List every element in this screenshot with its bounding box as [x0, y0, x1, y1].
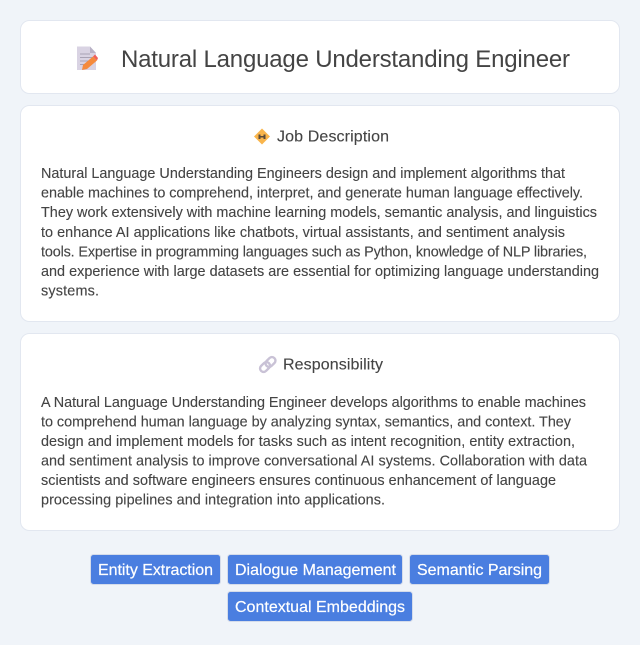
- text block: job description: tools. Expertise in programming languages such as Python, knowledge of NLP libraries,: [41, 244, 587, 260]
- tags: [90, 554, 550, 622]
- text block: responsibility: A Natural Language Understanding Engineer develops algorithms to enable machines: [41, 395, 586, 411]
- tag: entity extraction: Entity Extraction: [98, 562, 213, 579]
- panel: responsibility: [20, 334, 620, 530]
- text block: job description: systems.: [41, 284, 99, 300]
- text block: responsibility: design and implement models for tasks such as intent recognition, entity extraction,: [41, 434, 575, 450]
- icon: orange diamond: [254, 128, 270, 144]
- panel: job description: [20, 106, 620, 322]
- tag: semantic parsing: [410, 554, 550, 584]
- text block: responsibility: scientists and software engineers ensures continuous enhancement of language: [41, 473, 556, 489]
- tag: contextual embeddings: Contextual Embeddings: [235, 599, 405, 616]
- tag: semantic parsing: Semantic Parsing: [417, 562, 542, 579]
- heading: responsibility: Responsibility: [283, 356, 383, 374]
- text block: responsibility: [41, 395, 587, 508]
- text block: responsibility: to comprehend human language by analyzing syntax, semantics, and context. They: [41, 414, 572, 430]
- text block: responsibility: processing pipelines and integration into applications.: [41, 492, 385, 508]
- title: Natural Language Understanding Engineer: [121, 46, 570, 73]
- tag: dialogue management: Dialogue Management: [235, 562, 397, 579]
- text block: job description: to enhance AI applications like chatbots, virtual assistants, and sentiment analysis: [41, 225, 565, 241]
- tag: contextual embeddings: [228, 592, 412, 622]
- tag: dialogue management: [228, 554, 402, 584]
- text block: job description: [41, 166, 599, 300]
- heading: job description: Job Description: [277, 128, 389, 146]
- text block: responsibility: and sentiment analysis to improve conversational AI systems. Collaboration with data: [41, 454, 587, 470]
- text block: job description: enable machines to comprehend, interpret, and generate human language effectively.: [41, 186, 583, 202]
- panel: title header: [20, 20, 620, 94]
- text block: job description: They work extensively with machine learning models, semantic analysis, and linguistics: [41, 205, 597, 221]
- icon: document with pencil: [77, 46, 98, 70]
- tag: entity extraction: [90, 554, 220, 584]
- text block: job description: and experience with large datasets are essential for optimizing language understanding: [41, 264, 599, 280]
- icon: link: [259, 356, 277, 373]
- text block: job description: Natural Language Understanding Engineers design and implement algorithms that: [41, 166, 565, 182]
